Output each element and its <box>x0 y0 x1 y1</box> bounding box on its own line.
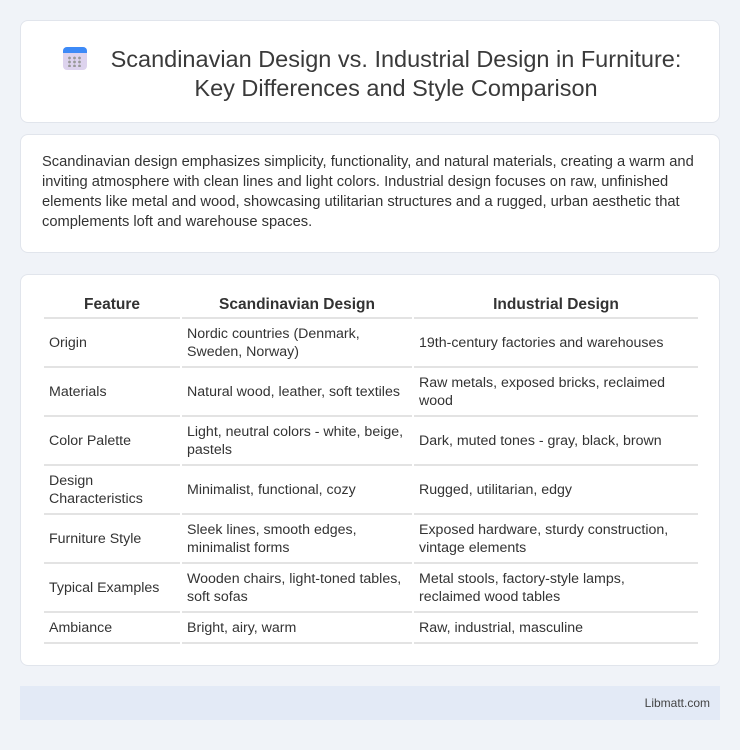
comparison table: Minimalist, functional, cozy <box>187 482 356 498</box>
footer <box>20 686 720 720</box>
comparison table: Dark, muted tones - gray, black, brown <box>419 432 662 448</box>
comparison table: Materials <box>49 384 107 400</box>
comparison table: Rugged, utilitarian, edgy <box>419 482 572 498</box>
comparison table: Typical Examples <box>49 580 159 596</box>
comparison table: Feature <box>84 296 140 313</box>
header card <box>20 20 720 123</box>
comparison table <box>44 296 698 644</box>
icon: calendar <box>63 47 87 70</box>
comparison table: Origin <box>49 334 87 350</box>
footer text: Libmatt.com <box>645 696 710 710</box>
comparison table: 19th-century factories and warehouses <box>419 334 663 350</box>
table card <box>20 274 720 666</box>
comparison table: Sleek lines, smooth edges, minimalist forms <box>187 522 357 556</box>
comparison table: Industrial Design <box>493 296 619 313</box>
comparison table: Light, neutral colors - white, beige, pastels <box>187 424 403 458</box>
comparison table: Nordic countries (Denmark, Sweden, Norway) <box>187 326 360 360</box>
comparison table: Design Characteristics <box>49 472 143 506</box>
comparison table: Furniture Style <box>49 530 141 546</box>
description text: Scandinavian design emphasizes simplicity, functionality, and natural materials, creating a warm and inviting atmosphere with clean lines and light colors. Industrial design focuses on raw, unfinished elements like metal and wood, showcasing utilitarian structures and a rugged, urban aesthetic that complements loft and warehouse spaces. <box>42 154 694 230</box>
title: Scandinavian Design vs. Industrial Design in Furniture: Key Differences and Style Comparison <box>111 46 681 101</box>
comparison table: Metal stools, factory-style lamps, reclaimed wood tables <box>419 570 625 604</box>
comparison table: Ambiance <box>49 620 112 636</box>
comparison table: Scandinavian Design <box>219 296 375 313</box>
comparison table: Exposed hardware, sturdy construction, vintage elements <box>419 522 668 556</box>
comparison table: Color Palette <box>49 432 131 448</box>
comparison table: Natural wood, leather, soft textiles <box>187 384 400 400</box>
comparison table: Bright, airy, warm <box>187 620 296 636</box>
description card <box>20 134 720 253</box>
comparison table: Wooden chairs, light-toned tables, soft sofas <box>187 570 401 604</box>
comparison table: Raw, industrial, masculine <box>419 620 583 636</box>
comparison table: Raw metals, exposed bricks, reclaimed wood <box>419 374 665 408</box>
